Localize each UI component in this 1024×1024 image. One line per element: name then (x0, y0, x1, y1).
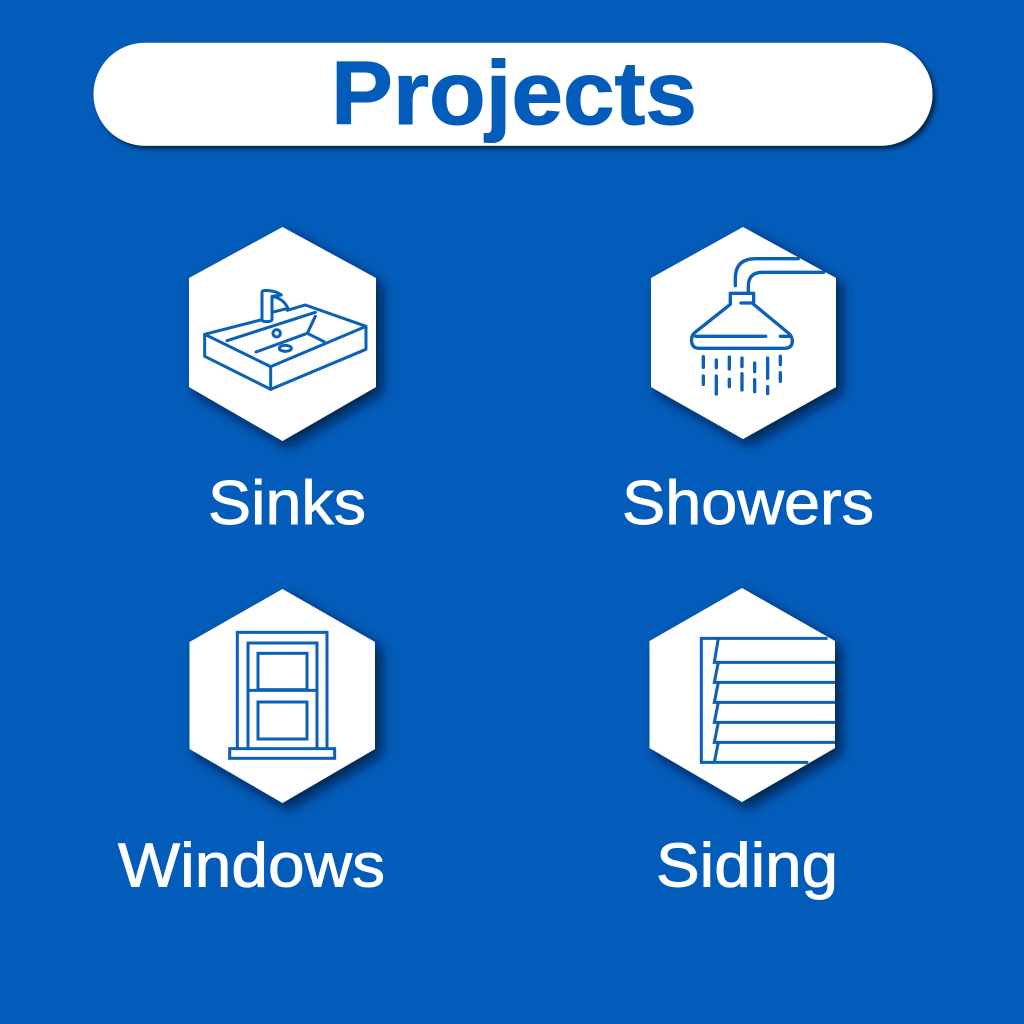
title banner: Projects (331, 44, 697, 144)
hexagon: siding (650, 588, 835, 802)
icon: window (230, 632, 335, 758)
label: Showers: Showers (622, 469, 874, 538)
hexagon: sinks (189, 227, 376, 441)
panel: siding (650, 588, 838, 900)
panel: windows (118, 589, 385, 900)
panel: showers (622, 227, 874, 538)
hexagon: windows (190, 589, 375, 803)
title banner (94, 43, 932, 146)
label: Siding: Siding (656, 832, 838, 900)
label: Windows: Windows (118, 832, 385, 900)
label: Sinks: Sinks (208, 469, 366, 538)
icon: sink (205, 290, 366, 389)
icon: siding (701, 638, 835, 762)
icon: shower (692, 259, 824, 394)
panel: sinks (189, 227, 376, 538)
hexagon: showers (651, 227, 836, 439)
